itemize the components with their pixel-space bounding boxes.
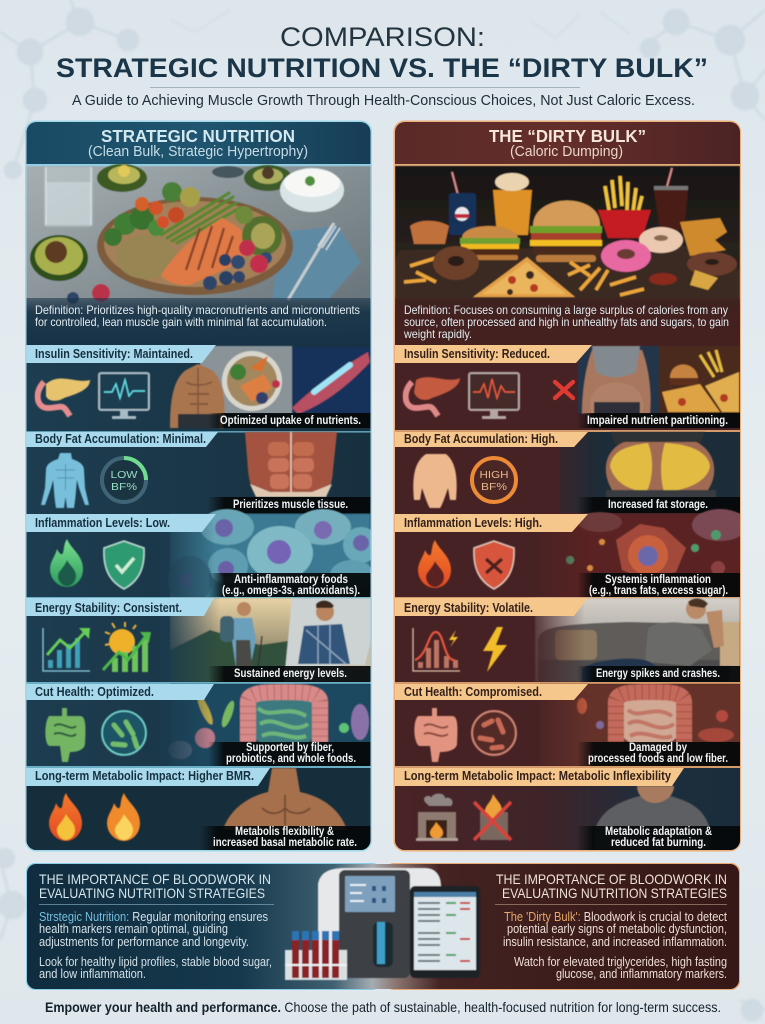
icon: growth chart [43, 628, 90, 671]
label: body fat: Body Fat Accumulation: Minimal. [35, 431, 206, 446]
icon: sun with growth [103, 622, 151, 672]
caption: impaired: Impaired nutrient partitioning. [587, 413, 728, 427]
right bloodwork text: Watch for elevated triglycerides, high fasting [514, 955, 727, 969]
label: body fat high: Body Fat Accumulation: High. [404, 431, 558, 446]
right header [395, 122, 740, 166]
left bloodwork text: adjustments for performance and longevity. [39, 935, 249, 949]
row: body fat high [395, 430, 740, 513]
caption: increased fat [577, 497, 740, 513]
right bloodwork text [495, 871, 727, 981]
row: metabolic inflexibility [395, 766, 740, 850]
photo: junk food [395, 165, 740, 326]
caption: fiber probiotics: Supported by fiber, [246, 740, 334, 754]
icon: low BF% gauge: LOW [110, 469, 138, 481]
left header: (Clean Bulk, Strategic Hypertrophy) [88, 144, 308, 160]
icon: damaged pancreas [406, 377, 460, 416]
label: gut compromised: Cut Health: Compromised. [404, 684, 542, 699]
icon: low BF% gauge [102, 458, 146, 502]
panel: strategic nutrition [25, 120, 379, 852]
icon: glowing flame [107, 793, 140, 841]
footer text: Empower your health and performance. Choose the path of sustainable, health-focused nutrition for long-term success. [45, 999, 721, 1015]
title [56, 22, 708, 83]
right definition: Definition: Focuses on consuming a large surplus of calories from any [404, 303, 728, 317]
right rows background [395, 345, 740, 850]
right bloodwork text: glucose, and inflammatory markers. [556, 967, 727, 981]
row: gut compromised [395, 682, 740, 766]
icon: red x [555, 382, 573, 398]
left bloodwork text: Look for healthy lipid profiles, stable blood sugar, [39, 955, 272, 969]
caption: metabolic adaptation [577, 824, 740, 850]
caption: damaged [577, 740, 740, 766]
caption: metabolic adaptation: reduced fat burning. [611, 835, 706, 849]
caption: increased fat: Increased fat storage. [608, 497, 708, 511]
row: energy volatile [395, 597, 740, 682]
caption: metabolic flexibility: Metabolis flexibility & [235, 824, 334, 838]
label: metabolic: Long-term Metabolic Impact: Higher BMR. [35, 768, 254, 783]
caption: metabolic flexibility: increased basal metabolic rate. [213, 835, 357, 849]
right bloodwork text: EVALUATING NUTRITION STRATEGIES [502, 885, 727, 901]
icon: broken shield [474, 541, 514, 589]
caption: damaged: processed foods and low fiber. [588, 751, 728, 765]
icon: green gut [45, 708, 85, 762]
left bloodwork text: EVALUATING NUTRITION STRATEGIES [39, 885, 265, 901]
caption: metabolic adaptation: Metabolic adaptation & [605, 824, 712, 838]
icon: high BF% gauge [472, 458, 516, 502]
icon: high BF% gauge: BF% [481, 481, 507, 493]
big burger [533, 200, 600, 226]
right definition: weight rapidly. [403, 327, 472, 341]
caption: damaged: Damaged by [629, 740, 687, 754]
fries and pizza [404, 258, 644, 295]
icon: overweight body [413, 454, 457, 508]
caption: anti-inflammatory [208, 572, 371, 597]
icon: probiotic circle [102, 711, 146, 755]
row: gut health [26, 682, 371, 766]
row: insulin reduced [406, 346, 740, 419]
caption: systemic inflammation [577, 572, 740, 597]
row: inflammation low [50, 509, 379, 604]
icon: green shield [104, 541, 144, 589]
icon: erratic monitor [469, 373, 519, 419]
row: inflammation high [418, 509, 748, 598]
row: metabolic higher BMR [26, 766, 371, 850]
left bloodwork text: THE IMPORTANCE OF BLOODWORK IN [39, 871, 271, 887]
icon: red flame [418, 540, 451, 588]
subtitle: A Guide to Achieving Muscle Growth Through Health-Conscious Choices, Not Just Caloric Excess. [72, 93, 695, 109]
caption: systemic inflammation: Systemis inflammation [605, 572, 711, 586]
title: STRATEGIC NUTRITION VS. THE “DIRTY BULK” [56, 53, 708, 83]
label: energy volatile [395, 598, 588, 616]
caption: metabolic flexibility [200, 824, 371, 850]
right bloodwork text: potential early signs of metabolic dysfunction, [507, 922, 727, 936]
panel: dirty bulk [394, 120, 748, 852]
label: gut: Cut Health: Optimized. [35, 684, 154, 699]
left bloodwork text [39, 871, 274, 981]
icon: green flame [50, 539, 83, 587]
left definition: Definition: Prioritizes high-quality macronutrients and micronutrients [35, 303, 360, 317]
label: inflammation: Inflammation Levels: Low. [35, 515, 170, 530]
right bloodwork text: The 'Dirty Bulk': Bloodwork is crucial to detect [504, 910, 727, 924]
caption: optimized uptake: Optimized uptake of nutrients. [220, 413, 361, 427]
row: body fat minimal [26, 431, 371, 508]
analyzer, tablet and tubes [285, 868, 480, 980]
caption: sustained energy: Sustained energy levels. [234, 666, 347, 680]
right bloodwork text: THE IMPORTANCE OF BLOODWORK IN [496, 871, 727, 887]
right header: THE “DIRTY BULK” [489, 126, 646, 146]
icon: lean body [41, 453, 89, 508]
label: insulin: Insulin Sensitivity: Maintained. [35, 346, 193, 361]
panel: bloodwork [26, 863, 740, 990]
small burger [462, 226, 518, 238]
caption: anti-inflammatory: Anti-inflammatory foods [234, 572, 348, 586]
left bloodwork text: and low inflammation. [39, 967, 146, 981]
label: insulin reduced: Insulin Sensitivity: Reduced. [404, 346, 550, 361]
left bloodwork text: Strstegic Nutrition: Regular monitoring ensures [39, 910, 268, 924]
label: energy: Energy Stability: Consistent. [35, 600, 182, 615]
row: insulin sensitivity maintained [38, 346, 370, 428]
icon: volatile chart [413, 628, 460, 671]
caption: fiber probiotics: probiotics, and whole foods. [226, 751, 356, 765]
label: gut [26, 684, 214, 700]
label: inflammation high: Inflammation Levels: High. [404, 515, 542, 530]
left header: STRATEGIC NUTRITION [101, 126, 295, 146]
right bloodwork text: insulin resistance, and increased inflammation. [503, 935, 727, 949]
icon: flame [49, 793, 82, 841]
icon: pancreas [38, 379, 90, 416]
right definition [395, 298, 740, 345]
photo: healthy plate [26, 163, 370, 316]
icon: low BF% gauge: BF% [111, 481, 137, 493]
icon: high BF% gauge: HIGH [480, 469, 508, 481]
icon: lightning bolt [483, 627, 507, 672]
title: COMPARISON: [280, 22, 485, 52]
left definition: for controlled, lean muscle gain with minimal fat accumulation. [35, 315, 327, 329]
icon: monitor [99, 373, 149, 419]
left rows background [26, 345, 371, 850]
right header: (Caloric Dumping) [510, 144, 623, 160]
caption: prioritizes muscle: Prieritizes muscle tissue. [233, 497, 348, 511]
icon: fireplace [416, 794, 458, 841]
caption: energy spikes: Energy spikes and crashes. [596, 666, 720, 680]
label: metabolic inflexibility: Long-term Metabolic Impact: Metabolic Inflexibility [404, 768, 672, 783]
label: energy volatile: Energy Stability: Volatile. [404, 600, 533, 615]
icon: inflamed gut [414, 708, 457, 762]
caption: anti-inflammatory: (e.g., omegs-3s, antioxidants). [222, 583, 360, 597]
left definition [26, 298, 371, 345]
left bloodwork text: health markers remain optimal, guiding [39, 922, 228, 936]
caption: systemic inflammation: (e.g., trans fats, excess sugar). [589, 583, 728, 597]
left header [26, 122, 371, 166]
icon: crossed-out fire [474, 794, 511, 840]
icon: harmful bacteria [472, 711, 516, 755]
row: energy stability [26, 597, 371, 682]
donuts [639, 227, 683, 253]
caption: fiber probiotics [208, 740, 371, 766]
